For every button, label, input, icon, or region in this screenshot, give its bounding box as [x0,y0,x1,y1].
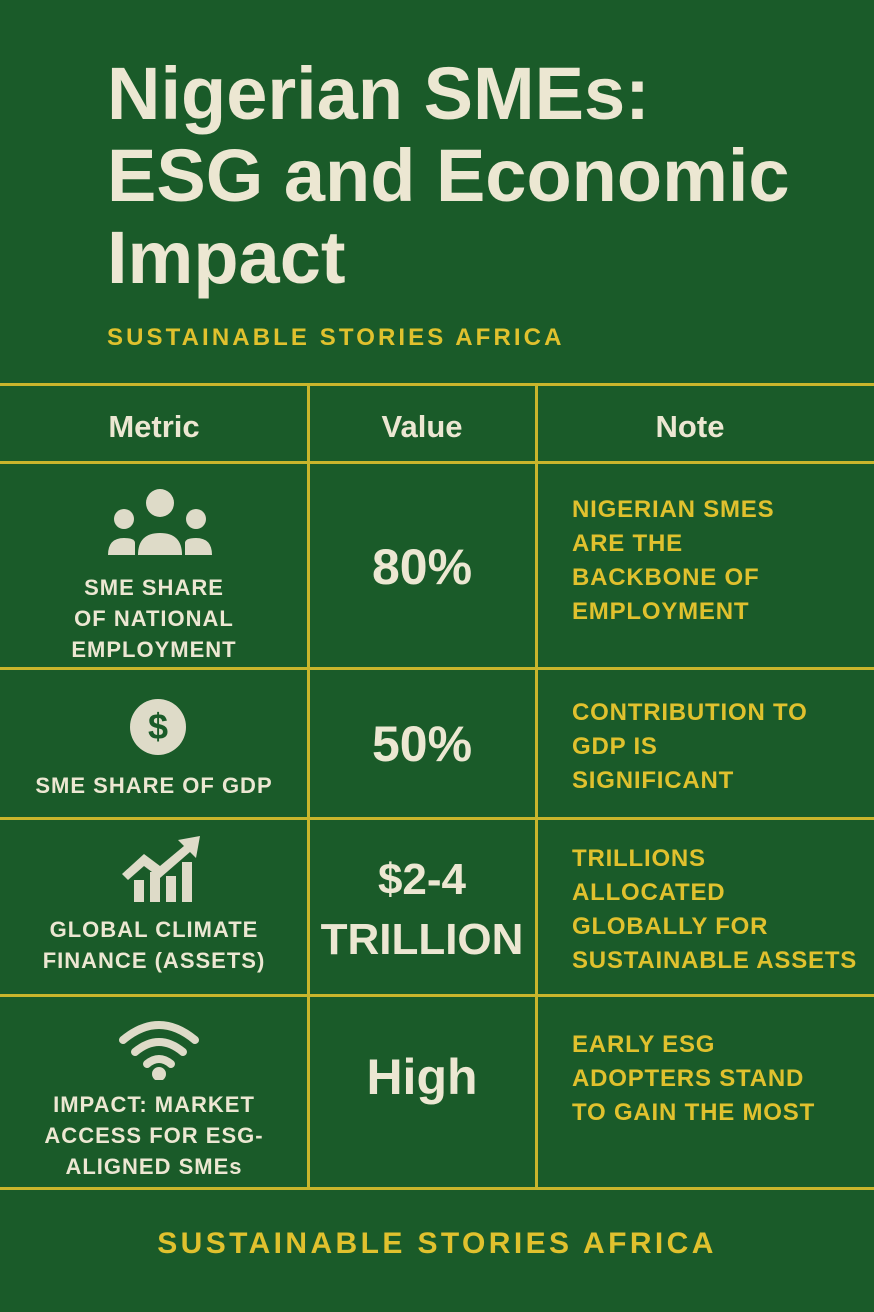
note: market access: EARLY ESG [572,1031,715,1058]
title: Nigerian SMEs: [107,52,650,135]
icon: dollar [130,699,186,755]
note: GDP: SIGNIFICANT [572,767,734,794]
note: climate finance [572,845,857,974]
value: 80%: 80% [372,539,472,595]
icon: dollar: $ [148,706,168,747]
title: ESG and Economic [107,134,790,217]
value: High: High [366,1049,478,1105]
label: GDP: SME SHARE OF GDP [35,773,273,798]
value: 50%: 50% [372,716,472,772]
label: climate finance: GLOBAL CLIMATE [50,917,258,942]
note: GDP [572,699,808,794]
table [0,383,874,1190]
value: $2-4 trillion [321,855,523,964]
note: employment: EMPLOYMENT [572,598,749,625]
note: climate finance: GLOBALLY FOR [572,913,768,940]
note: climate finance: SUSTAINABLE ASSETS [572,947,857,974]
label: market access [44,1092,264,1179]
note: employment: ARE THE [572,530,683,557]
header: Metric: Metric [108,409,200,444]
subtitle: SUSTAINABLE STORIES AFRICA [107,324,565,351]
header: Note: Note [656,409,724,444]
note: employment [572,496,774,625]
label: climate finance: FINANCE (ASSETS) [43,948,265,973]
note: employment: BACKBONE OF [572,564,759,591]
note: climate finance: TRILLIONS [572,845,706,872]
note: market access [572,1031,815,1126]
label: market access: ALIGNED SMEs [65,1154,243,1179]
label: market access: ACCESS FOR ESG- [44,1123,264,1148]
label: employment: SME SHARE [84,575,224,600]
icon: growth chart [122,836,200,902]
label: employment: EMPLOYMENT [71,637,237,662]
note: GDP: GDP IS [572,733,658,760]
note: GDP: CONTRIBUTION TO [572,699,808,726]
icon: wifi [119,1021,199,1080]
label: employment [71,575,237,662]
value: $2-4 trillion: TRILLION [321,915,523,964]
label: employment: OF NATIONAL [74,606,234,631]
value: $2-4 trillion: $2-4 [378,855,466,904]
label: climate finance [43,917,265,973]
label: market access: IMPACT: MARKET [53,1092,255,1117]
footer: SUSTAINABLE STORIES AFRICA [157,1227,717,1260]
note: climate finance: ALLOCATED [572,879,725,906]
header: Value: Value [382,409,462,444]
title [107,52,790,299]
icon: people [108,489,212,555]
note: market access: TO GAIN THE MOST [572,1099,815,1126]
title: Impact [107,216,346,299]
note: market access: ADOPTERS STAND [572,1065,804,1092]
note: employment: NIGERIAN SMES [572,496,774,523]
